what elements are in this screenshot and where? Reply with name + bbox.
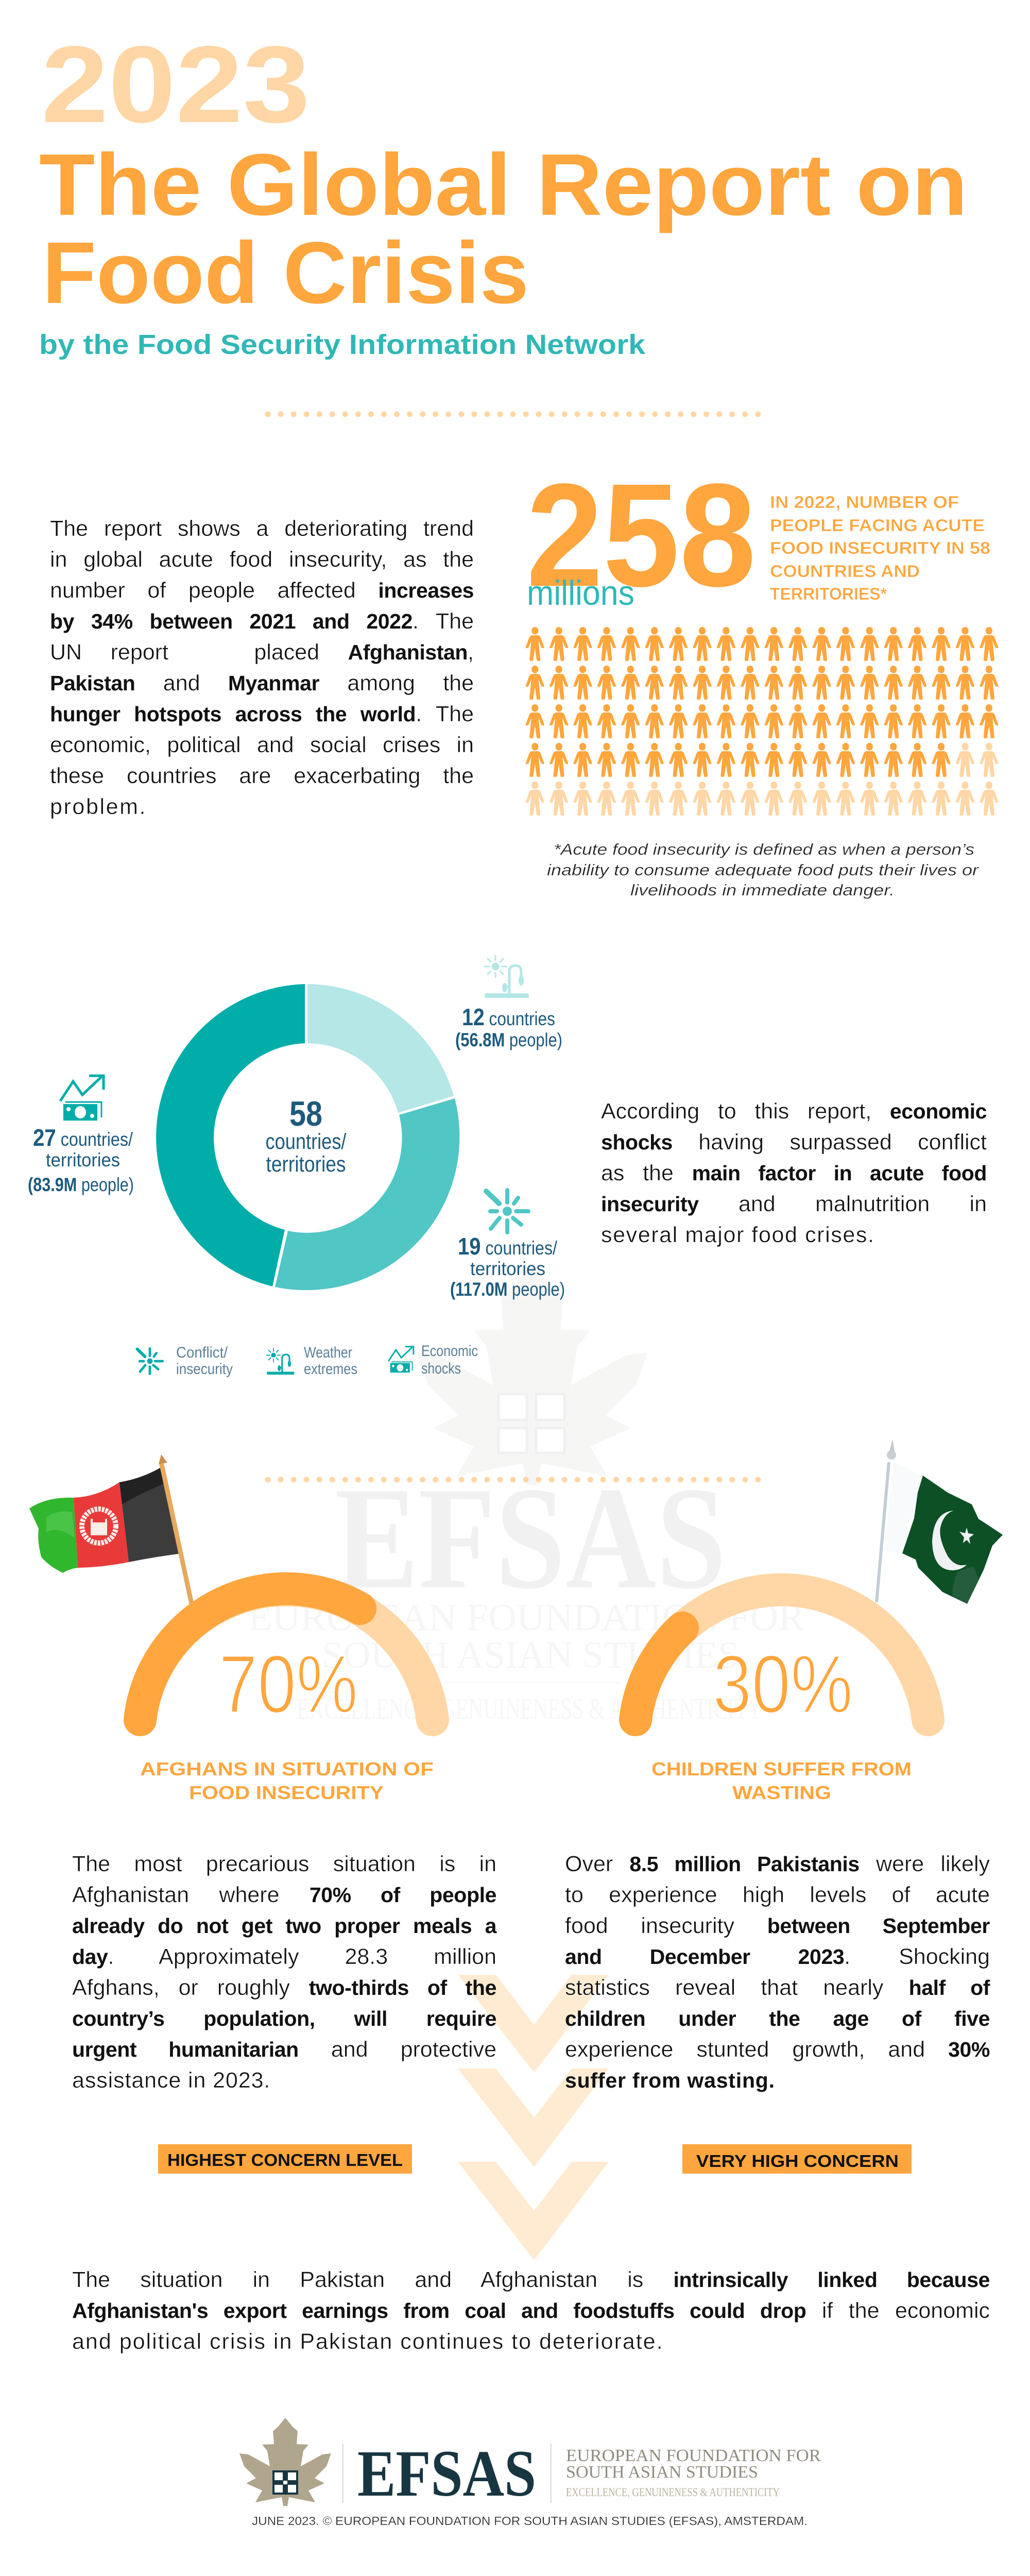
legend item: economic: Economic xyxy=(421,1343,478,1360)
text block: economic shocks: as the main factor in acute food xyxy=(601,1161,987,1185)
label: children suffer from wasting xyxy=(651,1758,912,1803)
logo leaf xyxy=(239,2418,331,2506)
donut chart xyxy=(156,984,459,1290)
text block: Afghanistan situation: The most precarious situation is in xyxy=(72,1852,496,1876)
segment: economic shocks xyxy=(156,984,305,1286)
text block: Pakistan situation: and December 2023. Shocking xyxy=(565,1944,990,1969)
text block: economic shocks: shocks having surpassed conflict xyxy=(601,1130,987,1155)
title: The Global Report on: The Global Report on xyxy=(39,136,968,234)
text block: Afghanistan situation: Afghans, or roughly two-thirds of the xyxy=(72,1975,496,2000)
text block: Afghanistan situation xyxy=(72,1852,497,2093)
logo emblem xyxy=(272,2470,298,2495)
icon: weather extremes xyxy=(485,956,529,998)
text block: economic shocks: According to this report, economic xyxy=(601,1099,987,1124)
logo wordmark: EFSAS xyxy=(357,2437,536,2510)
gauge number: 70% xyxy=(219,1638,358,1730)
text block: linked crises conclusion xyxy=(72,2267,990,2354)
segment: conflict xyxy=(275,1098,459,1290)
icon: conflict xyxy=(486,1190,528,1232)
label: Afghans in situation of food insecurity: AFGHANS IN SITUATION OF xyxy=(140,1758,434,1780)
label: 27 countries: 27 countries/ xyxy=(33,1124,133,1151)
text block: linked crises conclusion: Afghanistan's export earnings from coal and foodstuffs could drop if the economic xyxy=(72,2298,990,2323)
label: 27 countries xyxy=(28,1124,134,1195)
label: 27 countries: (83.9M people) xyxy=(28,1174,134,1195)
text block: economic shocks: several major food crises. xyxy=(601,1223,875,1247)
logo name xyxy=(566,2446,821,2499)
watermark square emblem xyxy=(499,1394,564,1453)
donut centre label: countries/ xyxy=(266,1129,347,1154)
footnote: definition: livelihoods in immediate danger. xyxy=(630,881,895,899)
stat description: IN 2022, NUMBER OF xyxy=(770,493,959,512)
text block: report introduction: economic, political and social crises in xyxy=(50,733,474,757)
stat description: TERRITORIES* xyxy=(770,584,887,603)
stat description: COUNTRIES AND xyxy=(770,562,920,581)
watermark tagline: EXCELLENCE, GENUINENESS & AUTHENTICITY xyxy=(297,1692,762,1725)
tag: highest concern level xyxy=(158,2144,412,2174)
label: 12 countries: 12 countries xyxy=(462,1004,555,1030)
label: Afghans in situation of food insecurity xyxy=(140,1758,434,1803)
text block: report introduction: Pakistan and Myanmar among the xyxy=(50,671,474,696)
donut centre label xyxy=(266,1094,347,1177)
gauge track xyxy=(140,1590,433,1720)
text block: Pakistan situation: food insecurity between September xyxy=(565,1913,990,1938)
logo: EFSAS xyxy=(239,2418,821,2510)
text block: Pakistan situation: experience stunted growth, and 30% xyxy=(565,2037,990,2062)
label: 27 countries: territories xyxy=(46,1149,120,1171)
label: 19 countries: (117.0M people) xyxy=(450,1279,565,1300)
gauge number: 30% xyxy=(713,1638,853,1730)
icon: Pakistan flag xyxy=(877,1439,1003,1604)
text block: report introduction: UN report placed Afghanistan, xyxy=(50,640,474,665)
label: 19 countries: 19 countries/ xyxy=(458,1233,558,1260)
text block: Afghanistan situation: urgent humanitarian and protective xyxy=(72,2037,496,2062)
tag: very high concern: VERY HIGH CONCERN xyxy=(696,2151,899,2171)
big number: 258 xyxy=(526,453,756,617)
text block: report introduction xyxy=(50,516,474,819)
text block: report introduction: by 34% between 2021 and 2022. The xyxy=(50,609,474,634)
watermark name line 1: EUROPEAN FOUNDATION FOR xyxy=(248,1597,805,1639)
legend item: weather xyxy=(267,1344,357,1378)
legend item: conflict: Conflict/ xyxy=(176,1344,228,1361)
text block: report introduction: in global acute food insecurity, as the xyxy=(50,547,474,572)
text block: Afghanistan situation: assistance in 2023. xyxy=(72,2068,270,2093)
tag: highest concern level: HIGHEST CONCERN LEVEL xyxy=(167,2150,403,2170)
label: children suffer from wasting: WASTING xyxy=(732,1782,831,1803)
text block: Afghanistan situation: already do not get two proper meals a xyxy=(72,1914,496,1938)
gauge: 70% Afghans xyxy=(140,1589,433,1730)
icon: economic shocks xyxy=(60,1076,104,1121)
gauge: 30% children xyxy=(636,1590,928,1730)
legend item: economic: shocks xyxy=(421,1360,461,1377)
subtitle: by the Food Security Information Network xyxy=(39,329,646,360)
millions label: millions xyxy=(527,573,634,613)
pictogram: 100 people grid xyxy=(526,627,998,816)
text block: Afghanistan situation: Afghanistan where 70% of people xyxy=(72,1883,496,1907)
tag: very high concern xyxy=(682,2144,912,2174)
label: children suffer from wasting: CHILDREN SUFFER FROM xyxy=(651,1758,912,1780)
label: Afghans in situation of food insecurity: FOOD INSECURITY xyxy=(189,1782,384,1803)
watermark wordmark: EFSAS xyxy=(335,1456,726,1619)
logo name: EUROPEAN FOUNDATION FOR xyxy=(566,2446,821,2465)
text block: report introduction: problem. xyxy=(50,794,147,819)
text block: Pakistan situation: to experience high levels of acute xyxy=(565,1883,990,1907)
icon: Afghanistan flag xyxy=(29,1454,192,1604)
title: 2023: 2023 xyxy=(41,23,310,145)
title: Food Crisis: Food Crisis xyxy=(42,224,529,322)
stat description: FOOD INSECURITY IN 58 xyxy=(770,538,990,557)
text block: report introduction: these countries are exacerbating the xyxy=(50,764,474,788)
donut centre label: territories xyxy=(266,1152,346,1177)
legend item: economic xyxy=(388,1343,478,1377)
watermark: EFSAS logo xyxy=(248,1263,805,1725)
gauge value xyxy=(140,1589,360,1720)
text block: economic shocks: insecurity and malnutrition in xyxy=(601,1192,987,1216)
legend item: conflict xyxy=(137,1344,233,1378)
label: 12 countries: (56.8M people) xyxy=(455,1029,562,1050)
label: 19 countries: territories xyxy=(470,1258,545,1279)
footnote: definition xyxy=(547,840,980,899)
text block: report introduction: hunger hotspots across the world. The xyxy=(50,702,474,726)
logo name: EXCELLENCE, GENUINENESS & AUTHENTICITY xyxy=(566,2486,780,2499)
legend item: weather: extremes xyxy=(304,1361,357,1378)
text block: economic shocks xyxy=(601,1099,987,1247)
text block: linked crises conclusion: The situation in Pakistan and Afghanistan is intrinsically linked because xyxy=(72,2267,990,2292)
legend item: weather: Weather xyxy=(304,1344,352,1361)
logo name: SOUTH ASIAN STUDIES xyxy=(566,2463,758,2482)
text block: Pakistan situation: statistics reveal that nearly half of xyxy=(565,1975,990,2000)
gauge value xyxy=(636,1628,682,1720)
label: 12 countries xyxy=(455,1004,562,1050)
text block: Pakistan situation: suffer from wasting. xyxy=(565,2069,775,2092)
donut centre label: 58 xyxy=(289,1094,322,1133)
text block: Pakistan situation: children under the age of five xyxy=(565,2007,990,2030)
stat description xyxy=(770,493,990,603)
legend xyxy=(137,1343,478,1378)
stat description: PEOPLE FACING ACUTE xyxy=(770,516,985,535)
segment: weather extremes xyxy=(307,984,454,1113)
label: 19 countries xyxy=(450,1233,565,1300)
text block: report introduction: The report shows a deteriorating trend xyxy=(50,516,474,541)
watermark name line 2: SOUTH ASIAN STUDIES xyxy=(322,1634,739,1676)
legend item: conflict: insecurity xyxy=(176,1361,233,1378)
text block: Afghanistan situation: day. Approximately 28.3 million xyxy=(72,1944,496,1969)
text block: linked crises conclusion: and political crisis in Pakistan continues to deteriorate. xyxy=(72,2329,664,2354)
gauge track xyxy=(636,1590,928,1720)
chevron arrows xyxy=(458,1975,609,2260)
text block: Pakistan situation: Over 8.5 million Pakistanis were likely xyxy=(565,1852,990,1876)
footnote: definition: *Acute food insecurity is defined as when a person’s xyxy=(554,840,974,858)
text block: Afghanistan situation: country’s population, will require xyxy=(72,2007,496,2030)
footnote: definition: inability to consume adequate food puts their lives or xyxy=(547,861,980,879)
stat: 258 millions xyxy=(526,453,756,617)
text block: report introduction: number of people affected increases xyxy=(50,578,474,603)
watermark maple leaf xyxy=(417,1263,647,1485)
text block: Pakistan situation xyxy=(565,1852,990,2092)
footer credit: JUNE 2023. © EUROPEAN FOUNDATION FOR SOUTH ASIAN STUDIES (EFSAS), AMSTERDAM. xyxy=(252,2514,808,2528)
